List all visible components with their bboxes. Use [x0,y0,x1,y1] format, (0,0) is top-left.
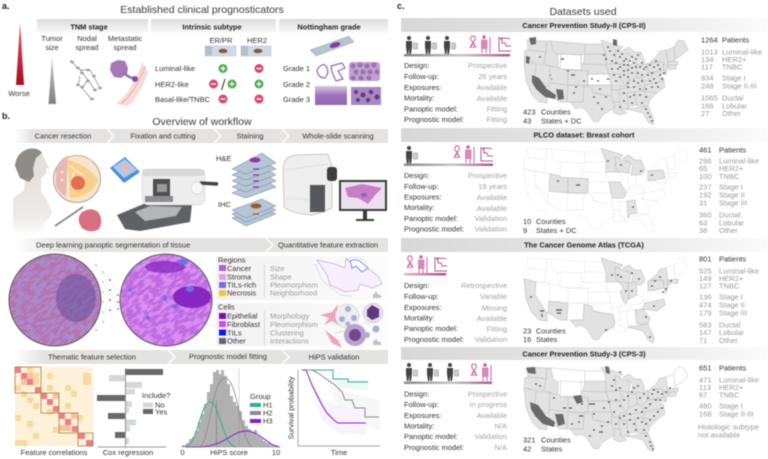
icon: scalpel [55,207,83,226]
map stats: Counties [536,326,566,336]
map: CPS-II counties [524,37,688,125]
table: cohort attributes: Prognostic model: [404,115,464,124]
panel: Intrinsic subtype: Intrinsic subtype [182,22,242,32]
image: H&E tissue [8,252,102,348]
stats: patients: Stage I [722,74,746,82]
stats: patients: Histologic subtype [698,422,759,432]
chart: HiPS score histogram [180,369,280,457]
stats: patients: 480 [699,402,712,410]
table: cohort attributes: Panoptic model: [404,432,458,441]
stats: patients: Luminal-like [719,156,759,166]
legend: cell classes: Epithelial [227,312,258,320]
stats: patients: Lobular [722,102,748,110]
panel: TNM stage: spread [76,43,98,52]
workflow band: row 2 [15,238,388,252]
table: cohort attributes: Prospective [468,390,507,398]
list: cell features: Pleomorphism [270,320,318,329]
map stats: States [541,444,563,454]
table: cohort attributes: Exposures: [404,83,442,92]
label: H&E: H&E [216,154,231,163]
stats: patients: Lobular [719,328,745,337]
table: cohort attributes: Follow-up: [404,72,439,81]
icon: IHC slide stack [232,199,276,226]
stats: patients: 583 [699,320,712,330]
panel: CPS-II dataset: Cancer Prevention Study-II (CPS-II) [522,21,646,30]
stats: patients: 136 [699,292,712,302]
workflow band: row 1: Fixation and cutting [130,132,196,140]
map stats: 23 [523,326,531,336]
icon: nodal spread [70,60,102,100]
map stats: 16 [523,335,531,344]
map stats: 43 [523,116,531,126]
legend: groups: H3 [263,416,273,426]
icon: grade tissue glands [315,62,381,105]
table: cohort attributes: Available [477,204,507,213]
stats: patients: 113 [699,383,711,392]
table: cohort attributes: Mortality: [404,203,434,212]
illustration: monitor [339,180,387,221]
stats: patients: Stage I [719,292,743,302]
map stats: Counties [536,217,566,226]
table: cohort attributes: Exposures: [404,192,442,202]
table: cohort attributes [404,281,507,344]
stats: patients: 147 [699,328,712,337]
map stats [523,217,577,235]
chart: Cox regression bars [97,368,170,447]
stats: patients: 117 [701,62,713,72]
panel: cells [216,302,388,348]
table: cohort attributes: Retrospective [461,281,507,290]
stats: patients: 474 [699,300,712,310]
panel: regions: Regions [218,256,246,264]
table: cohort attributes: N/A [494,443,507,452]
stats: patients: 192 [699,190,712,200]
workflow band: row 3: HiPS validation [309,352,359,362]
panel: Nottingham grade: Grade 2 [283,80,310,89]
stats: patients: Other [719,226,738,235]
icon: ER/PR slide [205,46,236,56]
panel: PLCO dataset [401,128,768,235]
chart: survival curves: Survival probability [286,376,296,439]
panel: TNM stage: spread [114,43,136,52]
stats: patients: Stage III [719,308,747,318]
icon: tissue cassette [110,157,140,183]
table: cohort attributes: Panoptic model: [404,104,458,114]
stats: patients: Other [722,109,741,118]
table: cohort attributes: Design: [404,171,429,180]
label: panel a: a. [2,1,10,11]
workflow band: row 3: Prognostic model fitting [189,352,267,361]
stats: patients: 248 [701,82,714,90]
workflow band: row 2: Quantitative feature extraction [278,240,378,250]
icon: neural network [95,264,119,331]
stats: patients [701,36,762,118]
stats: patients: HER2+ [719,383,744,392]
panel: Nottingham grade: Grade 3 [283,95,310,104]
table: cohort attributes: In progress [469,400,507,409]
table: cohort attributes: 26 years [478,72,507,81]
stats: patients: Luminal-like [719,266,759,276]
list: region features: Size [270,264,285,273]
list: cell features: Interactions [270,336,309,346]
table: cohort attributes: Exposures: [404,411,442,420]
panel: CPS-II dataset [401,18,768,126]
map stats: 42 [523,444,531,454]
stats: patients: 168 [699,410,712,418]
icon: H&E slide stack [232,153,276,198]
table: cohort attributes: Available [477,314,507,323]
stats: patients: Luminal-like [719,376,759,384]
table: cohort attributes: Prospective [468,171,507,180]
table: cohort attributes: Design: [404,390,429,398]
legend: include [142,391,170,416]
table: cohort attributes: Prognostic model: [404,224,464,234]
title: Overview of workflow: Overview of workflow [152,116,252,128]
panel: CPS-3 dataset [401,347,768,454]
icon: HER2 slide [241,46,271,56]
stats: patients: 179 [699,308,712,318]
map stats: 423 [523,108,536,116]
stats: patients: Stage II [719,300,745,310]
panel: TCGA dataset [401,238,768,345]
stats: patients: 471 [699,376,712,384]
list: region features: Neighborhood [270,288,317,298]
icon: H&E slide [310,36,354,56]
panel: TCGA dataset: The Cancer Genome Atlas (TCGA) [524,240,644,250]
chart: survival curves [286,370,380,457]
stats: patients: Ductal [722,94,744,102]
legend: groups: H1 [263,400,273,410]
icons: cohort and outcomes [404,363,492,384]
icons: cohort and outcomes [404,35,511,56]
table: cohort attributes: Fitting [487,115,507,124]
label: panel c: c. [397,1,405,11]
map stats [523,108,582,126]
title: Datasets used: Datasets used [549,6,617,18]
panel: cells: Cells [218,302,235,312]
stats: patients: HER2+ [719,164,744,173]
table: cohort attributes [404,390,507,452]
legend: region classes: Cancer [227,264,252,273]
stats: patients: Luminal-like [722,48,762,56]
panel: CPS-3 dataset: Cancer Prevention Study-3 (CPS-3) [522,350,646,358]
table: cohort attributes: 19 years [478,182,507,191]
stats: patients [699,146,759,235]
map stats: Counties [541,436,571,444]
label: panel b: b. [2,111,10,121]
table: cohort attributes: Prognostic model: [404,443,464,452]
stats: patients: 27 [701,109,709,118]
map stats [523,436,571,454]
panel: Nottingham grade [279,19,388,105]
workflow band: row 2: Deep learning panoptic segmentation of tissue [36,240,190,250]
workflow band: row 1: Cancer resection [35,132,91,140]
list: region features: Pleomorphism [270,280,318,290]
chart: survival curves: Time [331,448,347,457]
illustration: breast cross-section [54,156,100,202]
legend: region classes: TILs-rich [227,280,256,290]
table: cohort attributes: Validation [475,224,507,234]
stats: patients: TNBC [722,62,743,72]
stats: patients: Stage III [719,198,747,208]
panel: TNM stage: Tumor [41,34,63,43]
panel: Intrinsic subtype: HER2-like [155,80,189,89]
icons: cohort and outcomes [404,145,493,166]
chart: feature correlation heatmap [15,367,93,446]
chart: HiPS score histogram: 10 [272,448,280,457]
stats: patients: 67 [699,390,707,400]
list: cell features: Morphology [270,312,309,320]
title: Established clinical prognosticators: Established clinical prognosticators [120,4,284,16]
table: cohort attributes: Fitting [487,324,507,334]
stats: patients: 65 [699,164,707,173]
legend: cell classes: Other [227,336,246,346]
illustration: region outline [315,257,382,298]
table: cohort attributes: N/A [494,422,507,430]
legend: cell classes: Fibroblast [227,320,261,329]
stats: patients: 461 [699,146,712,154]
panel: Nottingham grade: Grade 1 [283,64,310,73]
stats: patients [699,254,759,345]
table: cohort attributes [404,171,507,234]
table: cohort attributes: Follow-up: [404,292,439,301]
stats: patients: HER2+ [719,274,744,283]
workflow band: row 1 [15,129,388,143]
stats: patients: HER2+ [722,55,747,64]
table: cohort attributes: Variable [480,292,507,301]
legend: region classes [219,264,256,298]
legend: cell classes [219,312,261,346]
table: cohort attributes: Available [477,83,507,92]
stats: patients: TNBC [719,390,740,400]
panel: Intrinsic subtype: ER/PR [210,36,233,45]
stats: patients: Stage II-III [722,82,757,90]
stats: patients: Stage II-III [719,410,754,418]
table: cohort attributes: Fitting [487,104,507,114]
stats: patients: 149 [699,274,712,283]
table: cohort attributes: Design: [404,61,429,70]
table: cohort attributes: Panoptic model: [404,324,458,333]
legend: groups: Group [250,392,271,401]
label: IHC: IHC [218,200,232,209]
stats: patients: TNBC [719,172,740,181]
label: Feature correlations: Feature correlations [21,448,88,457]
panel: Nottingham grade: Nottingham grade [297,22,361,32]
stats: patients: Ductal [719,320,741,330]
stats: patients: Stage I [719,182,743,192]
map stats: 321 [523,436,536,444]
legend: include: Yes [155,408,167,416]
legend: region classes: Stroma [227,272,252,282]
icon: worse severity triangle [8,23,30,98]
table: cohort attributes: Missing [482,304,507,312]
icons: outcomes [404,255,447,276]
legend: groups [250,392,273,426]
legend: region classes: Necrosis [227,288,256,298]
legend: cell classes: TILs [227,328,242,338]
panel: Intrinsic subtype: HER2 [247,36,267,45]
panel: Intrinsic subtype: Luminal-like [155,64,195,73]
stats: patients: 296 [699,156,712,166]
icon: metastatic spread [110,60,148,106]
table: cohort attributes: Mortality: [404,422,434,430]
workflow band: row 3: Thematic feature selection [48,352,136,362]
stats: patients: 801 [699,254,712,264]
panel: Intrinsic subtype: Basal-like/TNBC [155,95,211,104]
stats: patients: 71 [699,336,707,345]
map stats: States [536,335,558,344]
workflow band: row 1: Whole-slide scanning [302,132,374,140]
stats: patients: 100 [699,172,712,181]
workflow band: row 3 [15,350,388,364]
panel: TNM stage: Metastatic [108,34,142,43]
stats: patients [698,364,759,440]
stats: patients: 166 [701,102,714,110]
map: CPS-3 counties [524,366,688,452]
stats: patients: 63 [699,218,707,228]
icon: tumor size triangle [48,57,56,104]
map stats: States + DC [536,226,577,235]
list: region features [270,264,318,298]
panel: TNM stage: Nodal [77,34,97,43]
table: cohort attributes: Available [477,193,507,202]
stats: patients: 237 [699,182,712,192]
table: cohort attributes: Panoptic model: [404,214,458,223]
illustration: cells [320,303,383,348]
stats: patients: Patients [719,146,746,154]
list: cell features: Clustering [270,328,304,338]
legend: groups: H2 [263,408,273,418]
panel: regions [216,256,388,300]
table: cohort attributes: Available [477,411,507,420]
table: cohort attributes: Follow-up: [404,400,439,409]
stats: patients: Patients [719,364,746,372]
panel: TNM stage [37,19,148,106]
map: PLCO counties [524,148,688,233]
list: cell features [270,312,318,346]
stats: patients: 525 [699,266,712,276]
icon: plus and minus markers [209,64,264,104]
table: cohort attributes: Validation [475,432,507,441]
table: cohort attributes: Design: [404,281,429,290]
map stats: Counties [541,108,571,116]
table: cohort attributes: Prospective [468,61,507,70]
image: segmented tissue [118,252,214,348]
list: region features: Shape [270,272,292,282]
stats: patients: Lobular [719,218,745,228]
stats: patients: Ductal [719,210,741,220]
stats: patients: Other [719,336,738,345]
stats: patients: Patients [722,36,749,44]
stats: patients: 1013 [701,48,718,56]
stats: patients: 31 [699,198,707,208]
table: cohort attributes: Mortality: [404,94,434,102]
map stats: States + DC [541,116,582,126]
illustration: microtome [117,169,218,231]
stats: patients: Stage I [719,402,743,410]
panel: TNM stage: TNM stage [70,22,108,32]
map stats [523,326,566,344]
stats: patients: 1264 [701,36,718,44]
illustration: slide scanner [283,154,337,215]
label: Cox regression: Cox regression [103,448,153,457]
stats: patients: not available [698,430,740,440]
panel: TNM stage: size [45,43,59,52]
icon: worse severity triangle: Worse [8,89,30,98]
table: cohort attributes: Validation [475,214,507,223]
table: cohort attributes [404,61,507,124]
stats: patients: 38 [699,226,707,235]
stats: patients: TNBC [719,282,740,290]
panel: PLCO dataset: PLCO dataset: Breast cohort [533,130,635,140]
chart: HiPS score histogram: 0 [180,448,185,457]
stats: patients: Stage II [719,190,745,200]
legend: include: No [155,400,165,410]
stats: patients: 651 [699,364,712,372]
map stats: 9 [523,226,527,235]
table: cohort attributes: Follow-up: [404,182,439,191]
stats: patients: 360 [699,210,712,220]
stats: patients: 1065 [701,94,718,102]
illustration: patient [13,148,52,235]
illustration: resected tumor [79,209,101,231]
stats: patients: 127 [699,282,712,290]
map stats: 10 [523,217,531,226]
map: TCGA counties [524,258,688,343]
table: cohort attributes: Available [477,94,507,103]
legend: include: Include? [142,391,170,400]
table: cohort attributes: Prognostic model: [404,335,464,344]
stats: patients: 834 [701,74,714,82]
panel: Intrinsic subtype [151,19,276,104]
chart: HiPS score histogram: HiPS score [210,448,248,457]
table: cohort attributes: Validation [475,335,507,344]
table: cohort attributes: Exposures: [404,303,442,312]
stats: patients: 134 [701,55,714,64]
table: cohort attributes: Mortality: [404,314,434,322]
stats: patients: Patients [719,254,746,264]
workflow band: row 1: Staining [236,132,264,140]
